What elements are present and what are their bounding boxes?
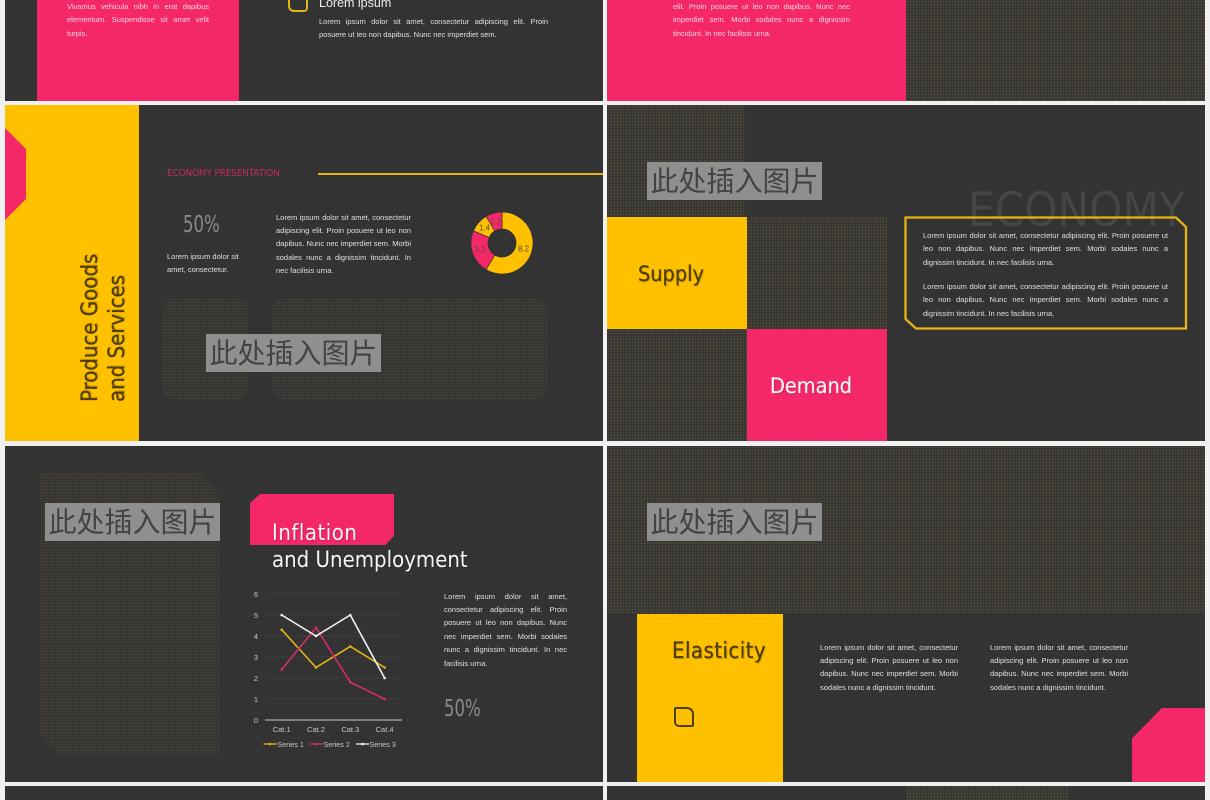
- heading: Produce Goods and Services: Produce Goods: [78, 254, 102, 402]
- text: column one: sodales nunc a dignissim tincidunt.: [820, 683, 936, 692]
- panel: produce goods and services: [5, 105, 603, 441]
- donut chart: [471, 212, 533, 274]
- text: callout paragraph one: Lorem ipsum dolor sit amet, consectetur adipiscing elit. Proin posuere ut: [923, 231, 1168, 240]
- image placeholder: dotted bottom: [607, 329, 747, 441]
- text: paragraph: facilisis urna.: [444, 659, 487, 668]
- ghost heading: ECONOMY: ECONOMY: [968, 183, 1185, 238]
- icon: rounded square: [674, 707, 694, 727]
- heading: Demand: Demand: [770, 374, 852, 399]
- panel: bottom right slide: [607, 786, 1205, 800]
- text: paragraph: posuere ut leo non dapibus. Nunc: [444, 618, 567, 627]
- text: column one: adipiscing elit. Proin posuere ut leo non: [820, 656, 958, 665]
- pink block: [607, 0, 906, 101]
- demand block: [747, 329, 887, 441]
- panel: top right slide: [607, 0, 1205, 101]
- heading: Inflation and Unemployment: Inflation: [272, 520, 357, 546]
- text: column one: dapibus. Nunc nec imperdiet sem. Morbi: [820, 669, 958, 678]
- donut chart: 3.2: [474, 246, 486, 254]
- text: paragraph: posuere ut leo non dapibus. Nunc nec imperdiet sem.: [319, 30, 497, 39]
- icon: yellow rounded square: [288, 0, 308, 12]
- line chart: Cat.4: [376, 725, 394, 734]
- line chart: 3: [254, 653, 258, 662]
- line chart: Series 3: [370, 740, 396, 749]
- panel: top left slide: [5, 0, 603, 101]
- text: callout paragraph two: [923, 282, 1168, 318]
- image placeholder: dotted middle: [747, 217, 887, 329]
- pink accent shape: [5, 128, 26, 220]
- panel: elasticity: [607, 446, 1205, 782]
- line chart: 2: [254, 674, 258, 683]
- text: column two: [990, 642, 1128, 692]
- text: pink block paragraph: [673, 2, 850, 38]
- panel: supply and demand: [607, 105, 1205, 441]
- heading: Supply: Supply: [638, 262, 704, 287]
- line chart: 6: [254, 590, 258, 599]
- image placeholder: dotted area: [607, 446, 1205, 613]
- text: paragraph: [444, 592, 567, 668]
- text: paragraph: nec imperdiet sem. Morbi sodales: [444, 632, 567, 641]
- image placeholder: dotted area: [906, 786, 1069, 800]
- yellow side block: [5, 105, 139, 441]
- heading: Inflation and Unemployment: [272, 520, 468, 572]
- heading: Elasticity: Elasticity: [672, 638, 766, 664]
- image placeholder: dotted right: [272, 298, 547, 400]
- line chart: [254, 590, 402, 749]
- line chart: Series 1: [278, 740, 304, 749]
- text: paragraph: consectetur adipiscing elit. Proin: [444, 605, 567, 614]
- text: stat caption: amet, consectetur.: [167, 265, 228, 274]
- text: callout paragraph two: Lorem ipsum dolor sit amet, consectetur adipiscing elit. Proin posuere ut: [923, 282, 1168, 291]
- stat: 50%: 50%: [183, 212, 220, 238]
- donut chart: 8.2: [518, 244, 530, 254]
- yellow rule: [318, 173, 603, 175]
- text: pink block paragraph: Vivamus vehicula nibh in erat dapibus: [67, 2, 209, 11]
- donut chart: 1.4: [479, 224, 491, 232]
- text: callout paragraph one: [923, 231, 1168, 267]
- line chart: Cat.2: [307, 725, 325, 734]
- text: column two: adipiscing elit. Proin posuere ut leo non: [990, 656, 1128, 665]
- label: Economy Presentation: ECONOMY PRESENTATION: [167, 168, 280, 179]
- yellow block: [637, 614, 783, 782]
- line chart: 0: [254, 716, 258, 725]
- image placeholder label: 此处插入图片: [209, 338, 378, 369]
- image placeholder: dotted area: [40, 473, 219, 755]
- stat: 50%: 50%: [444, 696, 481, 722]
- image placeholder: dotted area: [906, 0, 1205, 101]
- text: paragraph: nec facilisis urna.: [276, 266, 334, 275]
- text: column one: [820, 642, 958, 692]
- text: column two: sodales nunc a dignissim tincidunt.: [990, 683, 1106, 692]
- text: paragraph: Lorem ipsum dolor sit amet, consectetur: [276, 212, 411, 222]
- text: paragraph: Lorem ipsum dolor sit amet,: [444, 592, 567, 600]
- panel: bottom left slide: [5, 786, 603, 800]
- text: paragraph: [276, 212, 411, 275]
- text: callout paragraph two: leo non dapibus. Nunc nec imperdiet sem. Morbi sodales nunc a: [923, 295, 1168, 304]
- text: stat caption: Lorem ipsum dolor sit: [167, 252, 239, 261]
- text: pink block paragraph: tincidunt. In nec facilisis urna.: [673, 29, 771, 38]
- text: pink block paragraph: imperdiet sem. Morbi sodales nunc a dignissim: [673, 15, 850, 24]
- text: column two: Lorem ipsum dolor sit amet, consectetur: [990, 642, 1128, 652]
- heading: Inflation and Unemployment: and Unemployment: [272, 548, 468, 572]
- supply block: [607, 217, 747, 329]
- text: callout paragraph two: dignissim tincidunt. In nec facilisis urna.: [923, 309, 1054, 318]
- line chart: 1: [254, 695, 258, 704]
- text: paragraph: Lorem ipsum dolor sit amet, consectetur adipiscing elit. Proin: [319, 16, 548, 26]
- outlined callout frame: [904, 216, 1188, 330]
- text: callout paragraph one: dignissim tincidunt. In nec facilisis urna.: [923, 258, 1054, 267]
- text: pink block paragraph: elementum. Suspendisse sit amet velit: [67, 15, 209, 24]
- donut chart: 1.2: [490, 218, 502, 226]
- text: pink block paragraph: turpis.: [67, 29, 87, 38]
- text: column two: dapibus. Nunc nec imperdiet sem. Morbi: [990, 669, 1128, 678]
- text: pink block paragraph: elit. Proin posuere ut leo non dapibus. Nunc nec: [673, 2, 850, 11]
- image placeholder: dotted top: [607, 105, 745, 217]
- heading: Produce Goods and Services: and Services: [104, 275, 130, 402]
- line chart: Series 2: [324, 740, 350, 749]
- pink corner shape: [1132, 708, 1205, 782]
- line chart: Cat.1: [273, 725, 291, 734]
- panel: inflation and unemployment: [5, 446, 603, 782]
- line chart: 4: [254, 632, 258, 641]
- image placeholder: dotted left: [162, 298, 248, 400]
- text: pink block paragraph: [67, 2, 209, 38]
- pink block: [37, 0, 239, 101]
- image placeholder label: 此处插入图片: [650, 166, 818, 197]
- text: paragraph: [319, 16, 548, 39]
- image placeholder label: 此处插入图片: [48, 507, 216, 538]
- text: paragraph: dapibus. Nunc nec imperdiet sem. Morbi: [276, 239, 411, 248]
- text: paragraph: sodales nunc a dignissim tincidunt. In: [276, 253, 411, 262]
- line chart: Cat.3: [341, 725, 359, 734]
- image placeholder label: 此处插入图片: [650, 507, 818, 538]
- pink title shape: [250, 494, 394, 545]
- line chart: 5: [254, 611, 258, 620]
- heading: Produce Goods and Services: [78, 254, 130, 402]
- text: paragraph: adipiscing elit. Proin posuere ut leo non: [276, 226, 411, 235]
- text: column one: Lorem ipsum dolor sit amet, consectetur: [820, 642, 958, 652]
- text: stat caption: [167, 252, 239, 274]
- text: callout paragraph one: leo non dapibus. Nunc nec imperdiet sem. Morbi sodales nunc a: [923, 244, 1168, 253]
- text: paragraph: nunc a dignissim tincidunt. In nec: [444, 645, 567, 654]
